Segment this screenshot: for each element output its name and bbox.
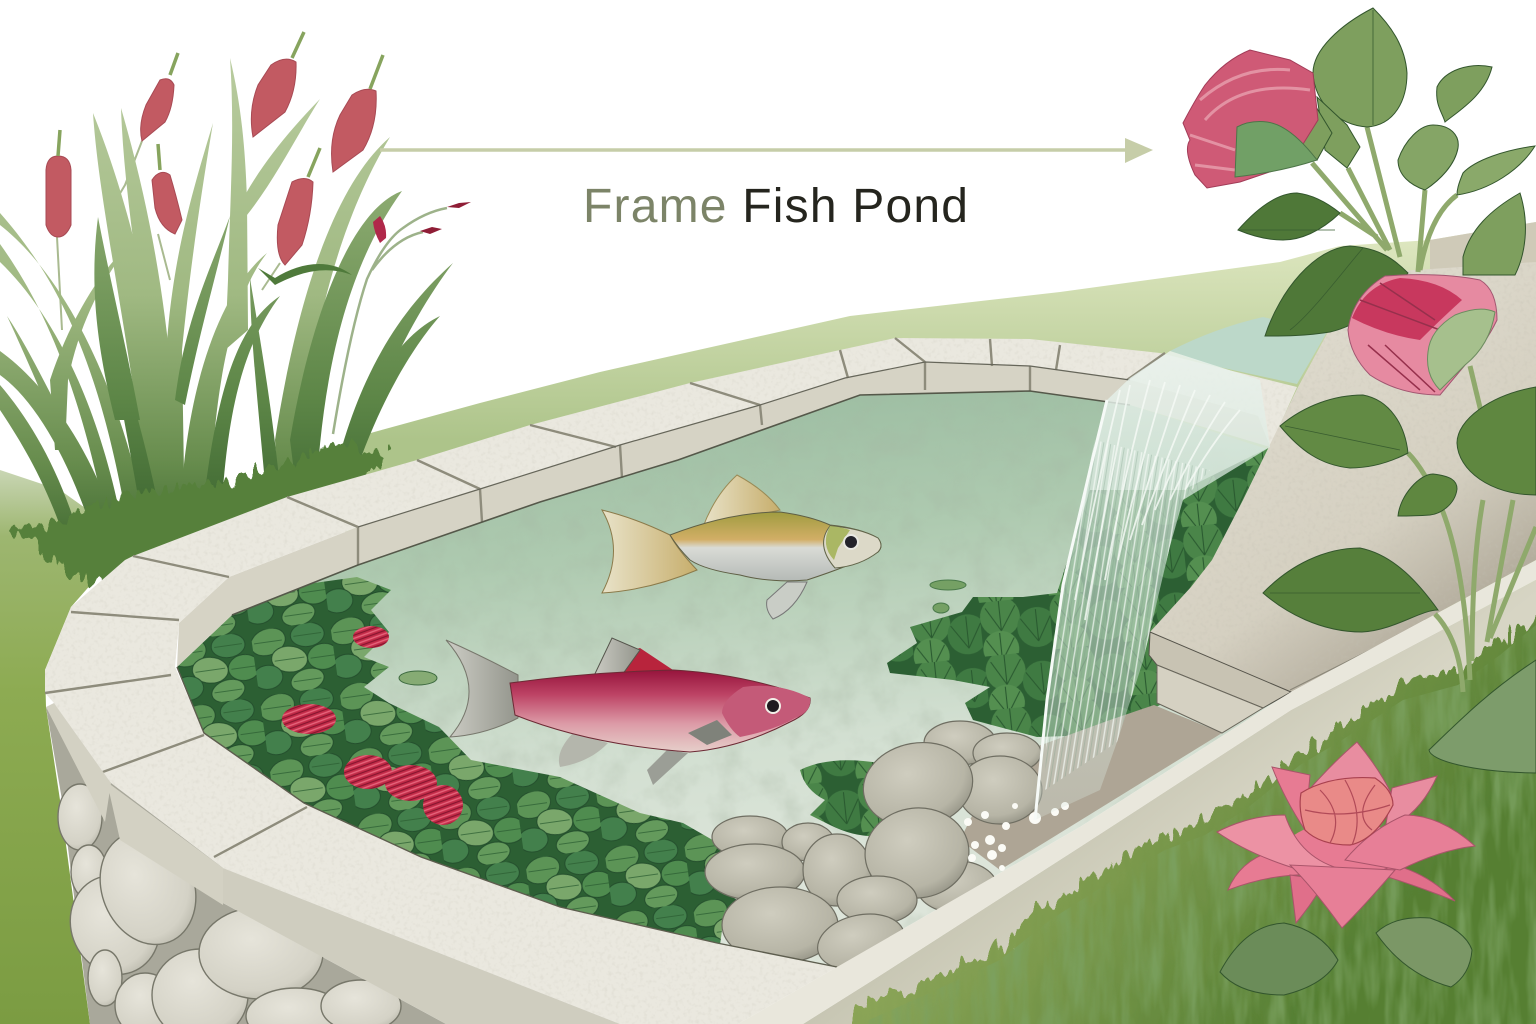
coping top face xyxy=(45,338,1297,1024)
fish: crimson xyxy=(446,638,810,785)
stone spillway mound xyxy=(1149,262,1536,733)
ledge faces xyxy=(1149,632,1291,708)
white foam blossoms xyxy=(964,802,1069,871)
stone coping rim xyxy=(45,338,1297,1024)
lily bud xyxy=(1300,778,1393,845)
upper pink rose xyxy=(1183,50,1318,188)
river stones xyxy=(705,721,1042,978)
bud stems xyxy=(333,208,447,434)
plant cluster: left bank water leaves xyxy=(177,577,737,945)
spillway floor xyxy=(960,705,1222,870)
plant cluster: behind waterfall xyxy=(800,447,1270,836)
far pool feeding channel xyxy=(1170,317,1327,384)
floating leaves centre pond xyxy=(930,580,966,613)
left lawn xyxy=(0,470,130,1024)
title: Frame Fish Pond xyxy=(583,180,968,233)
waterfall xyxy=(1035,351,1270,820)
red reed buds xyxy=(373,216,386,243)
lily leaves xyxy=(1220,923,1338,995)
red water flowers xyxy=(282,626,463,825)
coping block joints xyxy=(45,338,1165,857)
far grass slope xyxy=(345,222,1536,620)
lily petals xyxy=(1217,742,1475,928)
low grass tuft xyxy=(10,440,390,585)
grass blades xyxy=(0,58,453,540)
reeds and grass clump xyxy=(0,32,471,585)
stacked stone wall xyxy=(46,703,620,1024)
cattail heads xyxy=(46,59,376,265)
fish: golden xyxy=(602,475,881,619)
stems xyxy=(1312,127,1536,692)
leaves xyxy=(1238,8,1536,773)
coping front faces xyxy=(46,703,111,822)
coping inner back face xyxy=(177,362,1270,667)
flowering plant right xyxy=(1183,8,1536,773)
floating leaf xyxy=(399,671,437,685)
right-hand grass bank xyxy=(828,600,1536,1024)
cattail tips xyxy=(58,32,383,177)
lower pink rose xyxy=(1348,275,1497,395)
outer wall strip and face xyxy=(738,560,1536,1024)
reed stems xyxy=(57,141,280,330)
pond water xyxy=(177,391,1291,967)
pink water lily xyxy=(1217,742,1475,995)
title arrow xyxy=(380,138,1153,163)
